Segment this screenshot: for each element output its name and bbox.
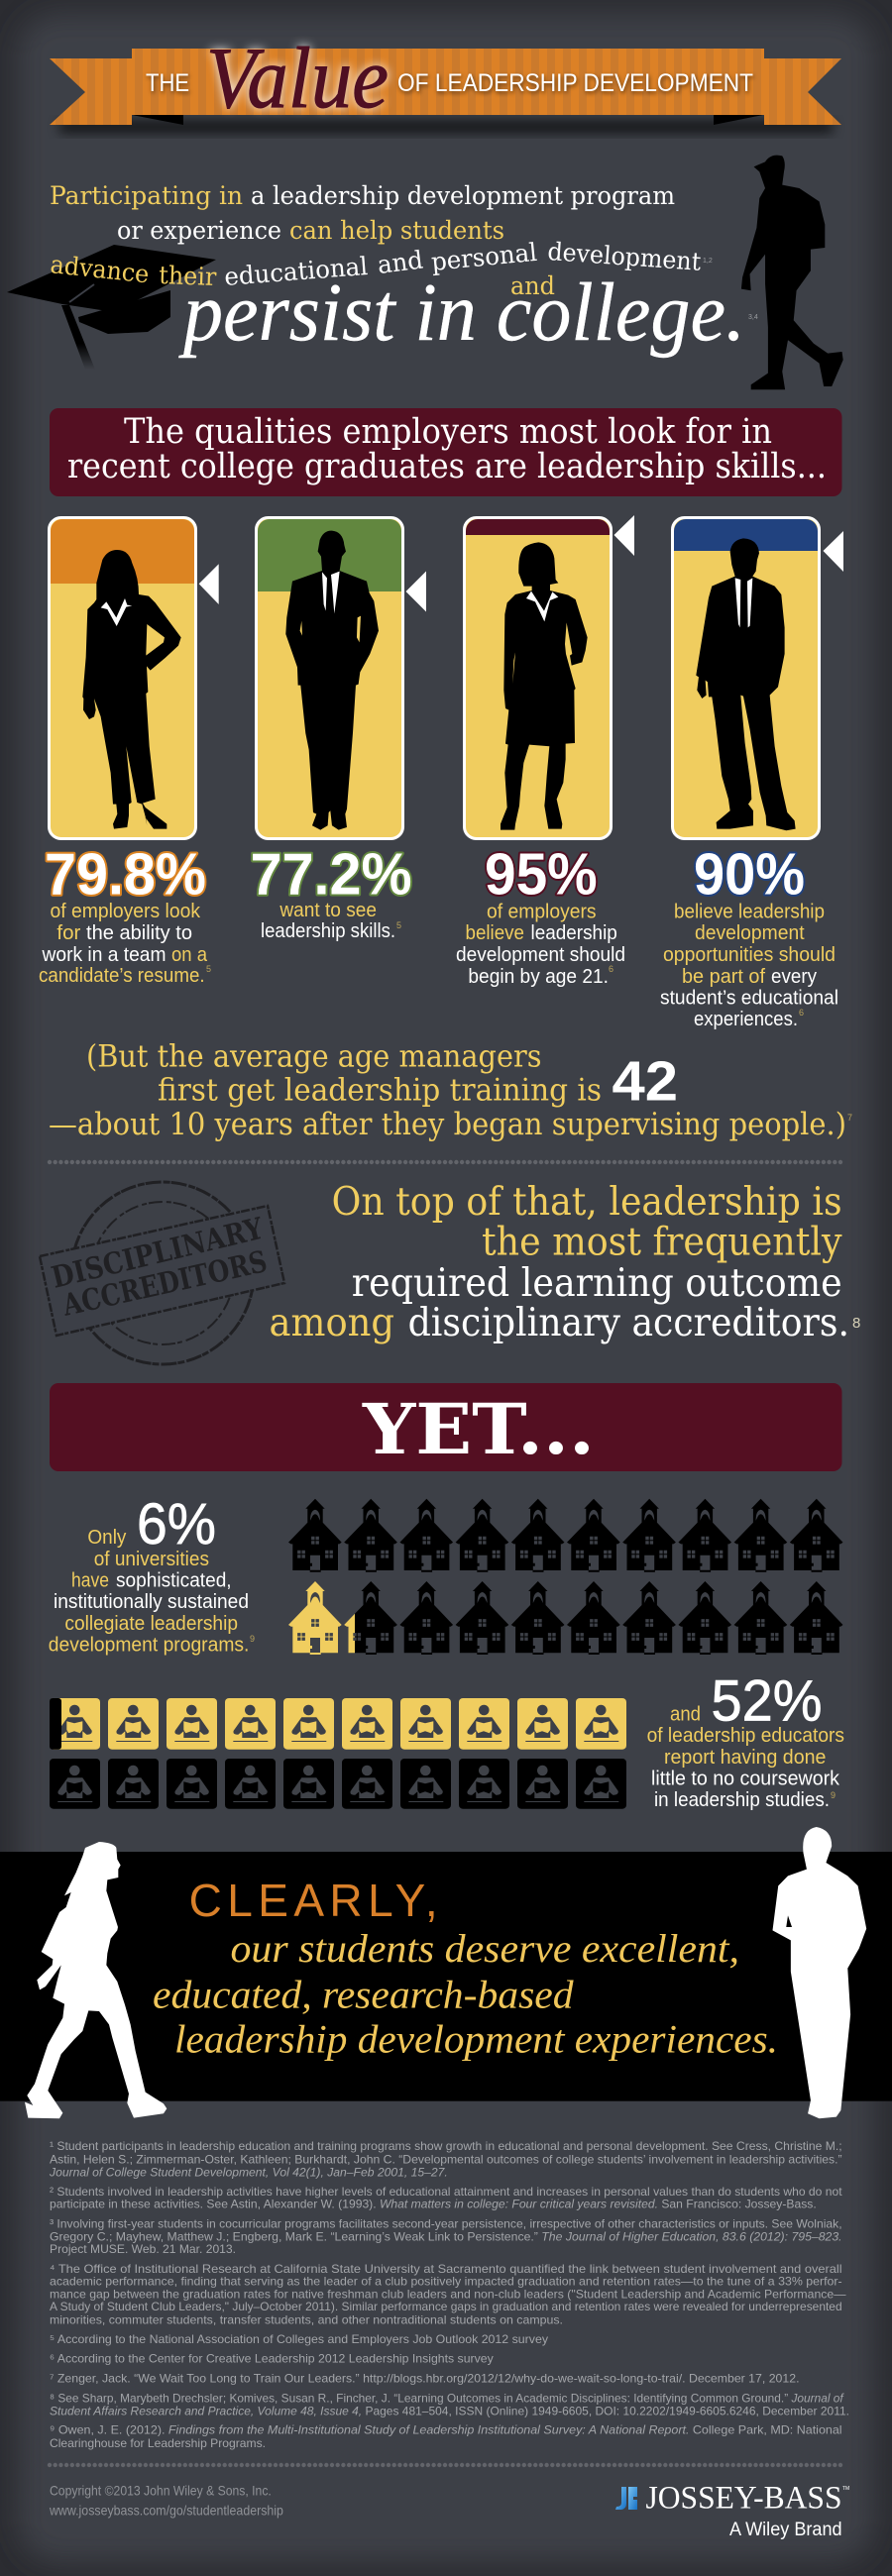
text block: leadership learning outcome: the most frequently: [482, 1221, 842, 1265]
footnotes: mance gap between the graduation rates for native freshman club leaders and non-club leaders ("Student Leadership and Academic Performance—: [50, 2287, 846, 2301]
description: leadership: [531, 922, 617, 944]
footnotes: ⁹ Owen, J. E. (2012). Findings from the Multi-Institutional Study of Leadership Institutional Survey: A National Report. College Park, MD: National: [50, 2423, 842, 2437]
panel: 77.2% card: [251, 517, 426, 942]
logo: Jossey-Bass: [615, 2481, 849, 2540]
stat: 52% of leadership educators: and: [670, 1704, 701, 1726]
icon: walking woman silhouette: [25, 1842, 167, 2118]
footnotes: ⁴ The Office of Institutional Research at California State University at Sacramento quantified the link between student involvement and overall: [50, 2262, 842, 2276]
text block: leadership learning outcome: On top of that, leadership is: [332, 1180, 842, 1225]
footnotes: ³ Involving first-year students in cocurricular programs facilitates second-year persistence, irrespective of other characteristics or inputs. See Wolniak,: [50, 2217, 842, 2231]
description: 6: [799, 1008, 804, 1018]
description: development: [695, 922, 805, 944]
stat: 6% of universities: collegiate leadership: [64, 1613, 238, 1635]
description: believe: [466, 922, 524, 944]
description: experiences.: [694, 1009, 798, 1030]
intro text: personal: [430, 238, 538, 276]
stat: 52% of leadership educators: 52%: [712, 1669, 823, 1734]
intro text: [49, 181, 758, 359]
callout: average age managers get training: [49, 1039, 852, 1142]
description: opportunities should: [663, 944, 836, 966]
heading panel: qualities employers look for: [50, 408, 842, 496]
description: [456, 902, 625, 988]
footnotes: ⁵ According to the National Association of Colleges and Employers Job Outlook 2012 survey: [50, 2332, 548, 2346]
panel: 90% card: [660, 517, 843, 1030]
intro text: can help students: [289, 216, 504, 245]
callout: average age managers get training: 7: [847, 1113, 852, 1123]
stat: 95%: 95%: [485, 842, 598, 908]
intro text: advance: [49, 250, 151, 288]
stat: 77.2%: 77.2%: [251, 842, 412, 908]
text block: leadership learning outcome: required learning outcome: [352, 1261, 842, 1306]
stat: 6% of universities: have: [71, 1570, 109, 1592]
description: be part of: [682, 966, 765, 988]
intro text: Participating in: [50, 181, 243, 210]
description: 5: [396, 920, 401, 930]
footnotes: participate in these activities. See Astin, Alexander W. (1993). What matters in college: Four critical years revisited. San Francisco: Jossey-Bass.: [50, 2198, 817, 2211]
intro text: persist in college.: [178, 267, 745, 359]
logo: Jossey-Bass: A Wiley Brand: [729, 2520, 842, 2540]
heading panel: qualities employers look for: recent college graduates are leadership skills...: [67, 447, 827, 486]
icon: graduation cap: [7, 245, 216, 370]
text block: leadership learning outcome: [270, 1180, 860, 1345]
description: want to see: [279, 900, 377, 921]
stat: 6% of universities: institutionally sustained: [54, 1591, 249, 1613]
text block: leadership learning outcome: disciplinary accreditors.: [408, 1301, 849, 1345]
description: of employers look: [50, 901, 201, 922]
footnotes: Project MUSE. Web. 21 Mar. 2013.: [50, 2242, 236, 2256]
logo: Jossey-Bass: JOSSEY-BASS: [646, 2481, 842, 2517]
description: leadership skills.: [261, 920, 395, 942]
pictogram: schoolhouses row 2 with 6% highlighted: [288, 1581, 842, 1655]
title text: THE: THE: [146, 69, 189, 97]
stat: 52% of leadership educators: 9: [831, 1790, 836, 1800]
text block: conclusion script: educated, research-based: [153, 1973, 575, 2017]
description: the ability to: [86, 922, 192, 944]
description: begin by age 21.: [468, 966, 609, 988]
description: every: [771, 966, 817, 988]
footnotes: Student Affairs Research and Practice, Volume 48, Issue 4, Pages 481–504, ISSN (Online) 1949-6605, DOI: 10.2202/1949-6605.6246, December 2011.: [50, 2404, 849, 2417]
icon: disciplinary accreditors stamp: DISCIPLINARY: [49, 1212, 267, 1296]
intro text: educational: [223, 252, 369, 291]
description: believe leadership: [674, 902, 825, 923]
panel: 95% card: [456, 515, 634, 988]
stat: 6% of universities: 9: [250, 1634, 255, 1644]
footnotes: ² Students involved in leadership activities have higher levels of educational attainment and increases in personal values than do students who do not: [50, 2185, 842, 2199]
description: 5: [206, 964, 211, 974]
icon: standing man silhouette: [772, 1827, 866, 2118]
logo mark: [615, 2487, 637, 2510]
title ribbon: [50, 31, 841, 133]
card figure: woman with hand on hip: [50, 517, 219, 838]
card figure: man in suit: [672, 517, 843, 838]
text block: conclusion script: [153, 1926, 778, 2062]
stat: 52% of leadership educators: of leadership educators: [647, 1725, 844, 1747]
footnotes: [49, 2139, 849, 2450]
intro text: their: [159, 261, 217, 291]
description: on a: [171, 944, 208, 966]
stat: 79.8%: 79.8%: [45, 842, 206, 908]
intro text: 3,4: [748, 314, 758, 321]
description: student’s educational: [660, 987, 838, 1009]
text block: conclusion script: our students deserve excellent,: [230, 1926, 739, 1971]
stat: 6% of universities: sophisticated,: [116, 1570, 232, 1592]
description: work in a team: [42, 944, 167, 966]
intro text: a leadership development program: [251, 181, 675, 210]
footnotes: Journal of College Student Development, Vol 42(1), Jan–Feb 2001, 15–27.: [49, 2166, 448, 2180]
footnotes: Astin, Helen S.; Zimmerman-Oster, Kathleen; Burkhardt, John C. “Developmental outcomes of college students’ involvement in leadership activities.”: [50, 2152, 842, 2166]
footnotes: A Study of Student Club Leaders," July–October 2011). Similar performance gaps in graduation and retention rates were revealed for underrepresented: [50, 2300, 842, 2313]
stat: 52% of leadership educators: in leadership studies.: [654, 1789, 830, 1811]
description: candidate’s resume.: [39, 965, 205, 987]
description: 6: [609, 964, 613, 974]
pictogram: readers row 1: [50, 1698, 626, 1750]
intro text: and: [510, 271, 555, 300]
pictogram: schoolhouses row 1: [288, 1499, 842, 1572]
title text: Value: Value: [206, 31, 389, 127]
footnotes: minorities, commuter students, transfer students, and other nontraditional students on campus.: [50, 2312, 563, 2326]
pictogram: readers row 2: [50, 1759, 626, 1809]
footnotes: academic performance, finding that serving as the leader of a club positively impacted graduation and retention rates—to the tune of a 33% perfor-: [50, 2275, 842, 2289]
heading panel: qualities employers look for: The qualities employers most look for in: [124, 412, 772, 452]
footnotes: ⁸ See Sharp, Marybeth Drechsler; Komives, Susan R., Fincher, J. “Learning Outcomes in Academic Disciplines: Identifying Common Ground.” Journal of: [50, 2391, 844, 2405]
stat: 52% of leadership educators: [647, 1669, 844, 1811]
icon: walking student with backpack: [741, 156, 843, 389]
icon: disciplinary accreditors stamp: ACCREDITORS: [58, 1244, 271, 1324]
intro text: development: [547, 237, 702, 276]
description: for: [56, 922, 81, 944]
text block: conclusion script: leadership development experiences.: [174, 2017, 778, 2062]
intro text: and: [376, 246, 424, 279]
text block: leadership learning outcome: among: [270, 1301, 394, 1345]
panel: conclusion band: [0, 1852, 892, 2101]
stat: 6% of universities: development programs.: [49, 1635, 249, 1657]
description: development should: [456, 944, 625, 966]
stat: 42: 42: [613, 1050, 678, 1114]
card figure: man with hands in pockets: [256, 517, 426, 838]
stat: 90%: 90%: [694, 842, 805, 908]
banner: YET: [50, 1383, 842, 1471]
banner: YET: YET...: [362, 1388, 595, 1470]
footnotes: Clearinghouse for Leadership Programs.: [50, 2436, 266, 2450]
stat: 52% of leadership educators: report having done: [664, 1747, 826, 1769]
title text: of leadership development: OF LEADERSHIP DEVELOPMENT: [397, 69, 753, 97]
description: of employers: [487, 902, 597, 923]
callout: average age managers get training: —about 10 years after they began supervising people.): [49, 1107, 846, 1142]
description: [261, 900, 401, 942]
copyright: [49, 2482, 283, 2518]
callout: average age managers get training: first get leadership training is: [158, 1073, 602, 1109]
intro text: or experience: [117, 216, 281, 245]
stat: 6% of universities: [49, 1492, 255, 1657]
footnotes: ¹ Student participants in leadership education and training programs show growth in educational and personal development. See Cress, Christine M.;: [50, 2139, 842, 2153]
icon: disciplinary accreditors stamp: [40, 1182, 284, 1364]
footnotes: ⁷ Zenger, Jack. “We Wait Too Long to Train Our Leaders.” http://blogs.hbr.org/2012/12/why-do-we-wait-so-long-to-trai/. December 17, 2012.: [50, 2371, 800, 2385]
intro text: 1,2: [703, 258, 713, 265]
stat: 6% of universities: Only: [87, 1527, 126, 1549]
logo: Jossey-Bass: TM: [842, 2486, 849, 2492]
card figure: woman in skirt: [464, 515, 634, 838]
description: [660, 902, 838, 1030]
stat: 6% of universities: of universities: [94, 1549, 209, 1570]
stat: 52% of leadership educators: little to no coursework: [651, 1769, 840, 1790]
text block: leadership learning outcome: 8: [852, 1315, 860, 1332]
footnotes: ⁶ According to the Center for Creative Leadership 2012 Leadership Insights survey: [50, 2351, 494, 2365]
copyright: Copyright ©2013 John Wiley & Sons, Inc.: [50, 2482, 272, 2498]
heading: clearly: CLEARLY,: [189, 1875, 438, 1926]
stat: 6% of universities: 6%: [137, 1492, 216, 1556]
callout: average age managers get training: (But the average age managers: [86, 1039, 541, 1075]
description: [39, 901, 211, 987]
footnotes: Gregory C.; Mayhew, Matthew J.; Engberg, Mark E. “Learning’s Weak Link to Persistence.” The Journal of Higher Education, 83.6 (2012): 795–823.: [50, 2229, 842, 2243]
panel: 79.8% card: [39, 517, 219, 987]
copyright: www.josseybass.com/go/studentleadership: [49, 2502, 283, 2518]
